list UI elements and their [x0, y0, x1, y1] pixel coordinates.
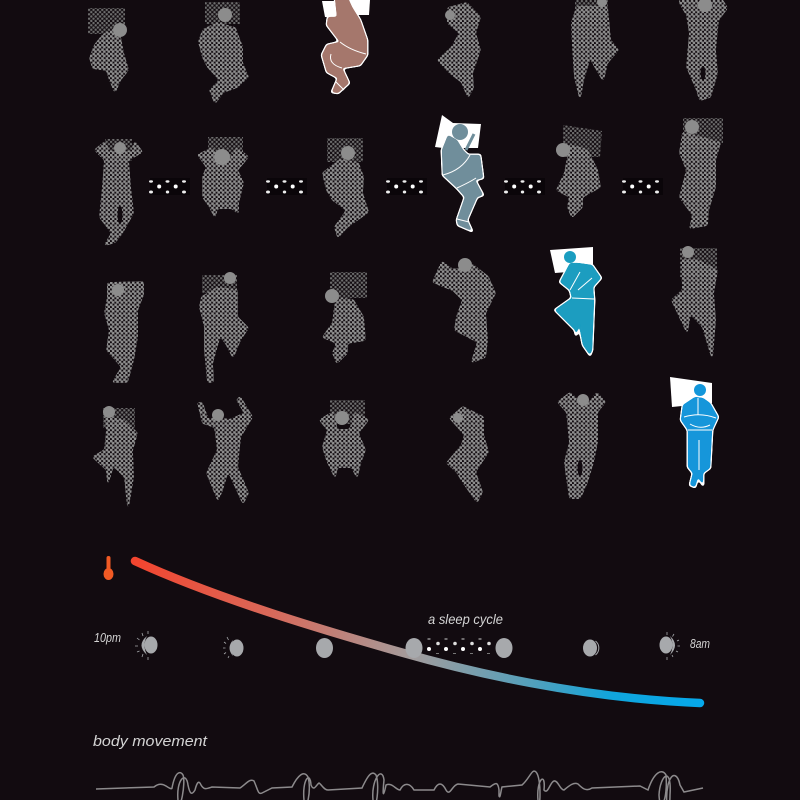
sleep cycle label: a sleep cycle [428, 611, 503, 627]
label: 8am: 8am [690, 637, 710, 651]
sleep cycle connector 2 [266, 178, 307, 195]
figure: row 3 highlighted teal sleeper [550, 247, 601, 355]
figure: row 1 position 2 [198, 2, 248, 103]
figure: row 2 position 5 [555, 125, 603, 219]
label: 10pm: 10pm [94, 631, 121, 645]
icon: thermometer [104, 556, 114, 580]
figure: row 4 position 5 [556, 391, 607, 500]
icon: moon phase 6 [583, 640, 599, 656]
figure: row 2 position 3 [321, 138, 370, 239]
figure: row 4 position 3 [318, 400, 370, 479]
figure: row 4 position 1 [91, 406, 139, 509]
sleep cycle dots [427, 638, 491, 654]
figure: row 1 position 6 [678, 0, 730, 103]
icon: moon phase 1 [135, 631, 158, 660]
icon: moon phase 2 [223, 637, 244, 658]
figure: row 3 position 1 [103, 280, 146, 384]
temperature curve [135, 561, 700, 703]
figure: row 4 position 4 [445, 405, 490, 504]
figure: row 2 highlighted grey-blue sleeper [435, 115, 483, 231]
sleep cycle connector 3 [386, 178, 427, 195]
sleep cycle connector 1 [149, 178, 190, 195]
figure: row 3 position 4 [431, 258, 497, 364]
icon: moon phase 7 [660, 632, 680, 660]
figure: row 2 position 2 [196, 137, 250, 219]
figure: row 1 position 5 [570, 0, 620, 100]
figure: row 3 position 3 [321, 272, 367, 365]
figure: row 1 highlighted brown sleeper [322, 0, 370, 93]
body movement line chart [96, 771, 703, 800]
label: body movement: body movement [93, 733, 208, 750]
icon: moon phase 5 [496, 638, 512, 658]
figure: row 2 position 1 [93, 139, 144, 248]
icon: moon phase 3 [316, 638, 333, 658]
figure: row 1 position 1 [88, 8, 128, 92]
sleep cycle connector 5 [622, 178, 663, 195]
icon: moon phase 4 [406, 638, 422, 658]
figure: row 4 position 2 [196, 395, 254, 505]
figure: row 3 position 6 [670, 246, 719, 359]
figure: row 4 highlighted blue sleeper [670, 377, 718, 487]
figure: row 1 position 4 [438, 2, 481, 97]
figure: row 3 position 2 [198, 272, 250, 384]
figure: row 2 position 6 [678, 118, 723, 230]
sleep cycle connector 4 [504, 178, 545, 195]
